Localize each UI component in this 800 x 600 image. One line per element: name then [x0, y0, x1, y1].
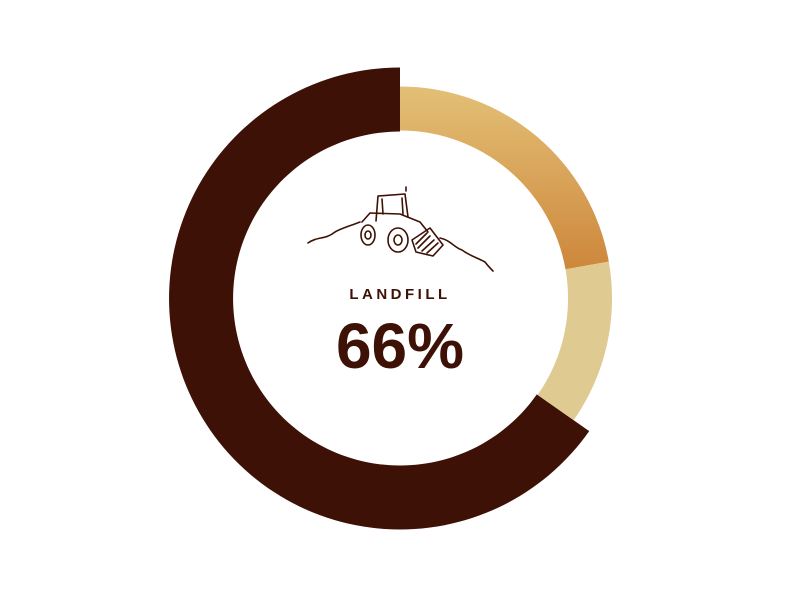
segment: landfill 66%	[169, 68, 589, 530]
segment: tan	[538, 262, 612, 420]
label: LANDFILL: LANDFILL	[349, 286, 451, 303]
value: 66%: 66%	[336, 310, 464, 382]
icon: bulldozer on landfill	[308, 187, 493, 271]
segment: gold	[400, 86, 609, 269]
